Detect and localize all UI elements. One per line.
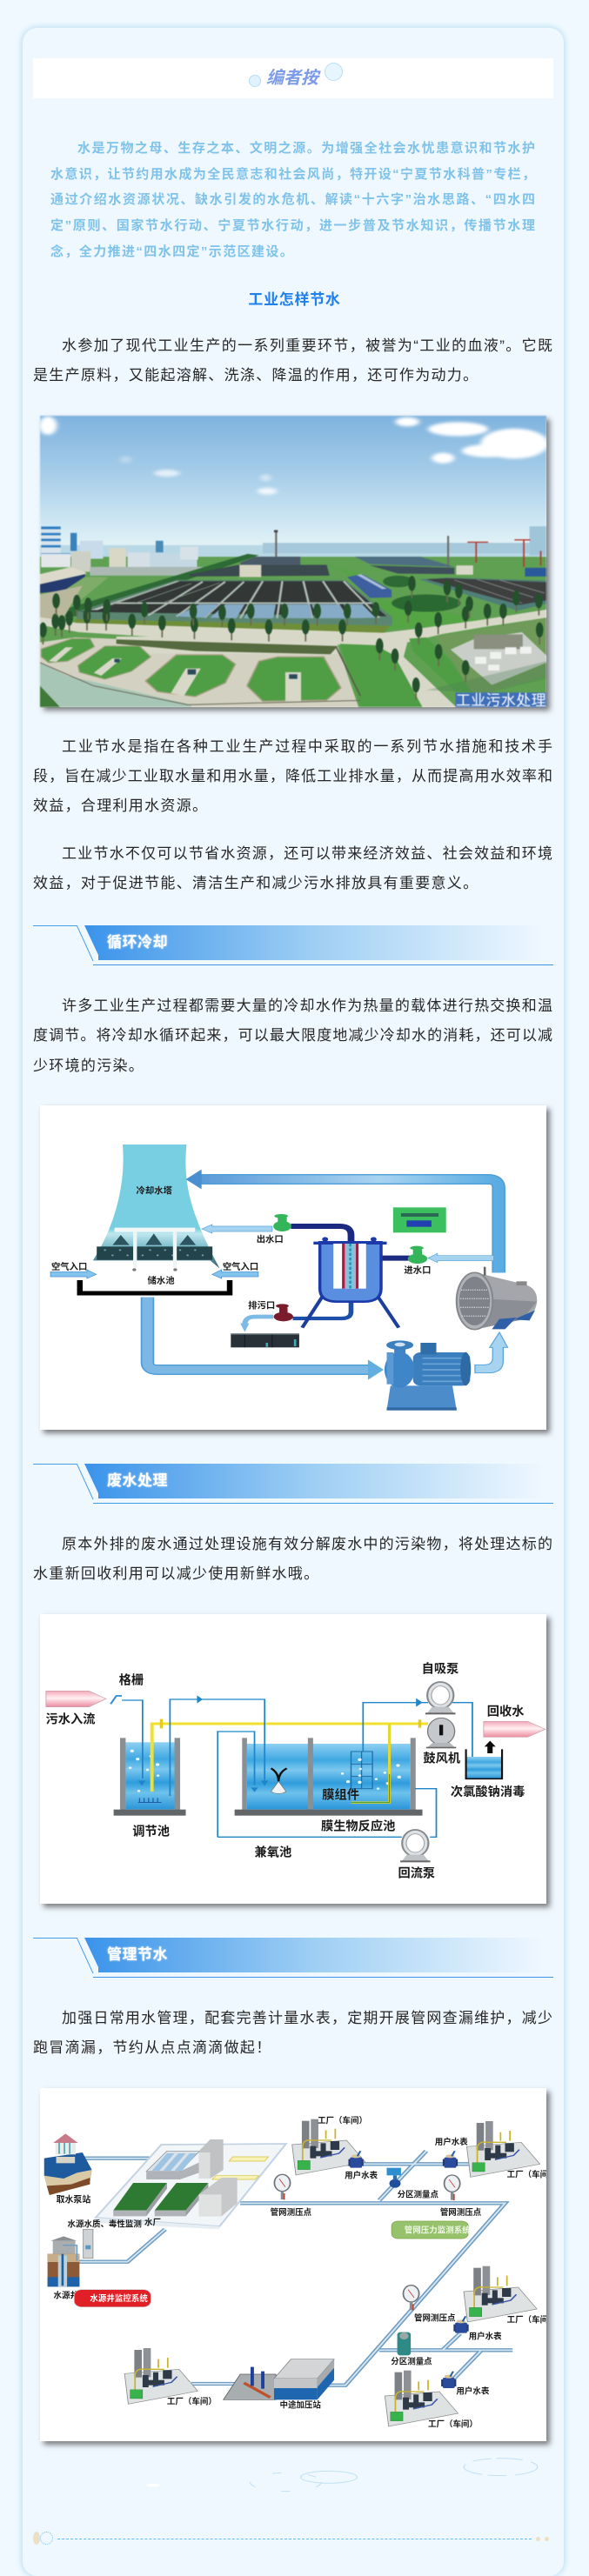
diagram: cooling water system: 空气入口	[223, 1261, 258, 1272]
labels: 鼓风机	[423, 1751, 461, 1766]
intake pump station	[44, 2133, 92, 2206]
text block: editor's note	[50, 141, 536, 259]
text block: editor's note: 定”原则、国家节水行动、宁夏节水行动，进一步普及节水知识，传播节水理	[50, 218, 536, 233]
text block: cooling	[33, 998, 553, 1074]
section header: wastewater treatment: 废水处理	[107, 1472, 168, 1489]
pump outlet arrow	[475, 1332, 508, 1373]
network labels: 用户水表	[456, 2386, 490, 2396]
tree belt	[41, 554, 259, 617]
factories	[292, 2119, 365, 2175]
icon: beige pill	[33, 2532, 40, 2545]
blue pipes	[122, 1699, 472, 1837]
filter vessel	[291, 1226, 412, 1328]
diagram: wastewater treatment process: 格栅	[119, 1672, 144, 1687]
filter outlet arrows	[202, 1225, 494, 1263]
diagram: cooling water system	[40, 1105, 546, 1430]
labels: 膜生物反应池	[321, 1818, 395, 1833]
heading: editor's note: 编者按	[266, 69, 318, 88]
text block: definition of industrial water saving	[33, 738, 553, 814]
text block: benefits: 工业节水不仅可以节省水资源，还可以带来经济效益、社会效益和环境	[62, 845, 553, 862]
section header: recirculating cooling	[33, 925, 553, 965]
left buildings	[41, 526, 61, 567]
labels: 膜组件	[322, 1787, 359, 1803]
section header: wastewater treatment	[33, 1464, 553, 1504]
labels: 回收水	[487, 1704, 525, 1718]
text block: editor's note: 水是万物之母、生存之本、文明之源。为增强全社会水忧患意识和节水护	[77, 141, 536, 156]
labels: 自吸泵	[422, 1660, 458, 1676]
decoration: water ripples	[146, 2458, 538, 2493]
heat exchanger	[457, 1267, 537, 1330]
monitoring station and well: 水源井	[54, 2291, 78, 2301]
booster station: 中途加压站	[279, 2399, 321, 2410]
reactor tank	[235, 1738, 423, 1816]
horizon	[40, 545, 546, 561]
section header: managed water saving	[33, 1938, 553, 1978]
zone flow meters	[387, 2168, 411, 2355]
trees	[39, 576, 544, 699]
diagram: wastewater treatment process	[40, 1614, 546, 1904]
cooling tower	[93, 1145, 219, 1271]
diagram: wastewater treatment process: 污水入流	[45, 1712, 95, 1727]
pumps	[425, 1682, 456, 1714]
icon: beige dots	[536, 2537, 549, 2541]
water plant: 水源水质、毒性监测	[68, 2219, 142, 2230]
labels	[132, 1660, 525, 1880]
labels: 次氯酸钠消毒	[451, 1784, 525, 1799]
diagram: cooling water system: 储水池	[147, 1275, 175, 1286]
text block: wastewater: 原本外排的废水通过处理设施有效分解废水中的污染物，将处理达标的	[62, 1536, 553, 1552]
booster station	[224, 2359, 334, 2410]
diagram: pipe network management	[40, 2088, 546, 2441]
red button: well monitoring	[74, 2290, 151, 2307]
text block: intro	[33, 337, 553, 384]
pump	[385, 1340, 471, 1411]
photo: industrial wastewater treatment plant	[40, 416, 546, 707]
network labels: 分区测量点	[398, 2190, 439, 2200]
right skyline	[530, 526, 546, 555]
monitoring station and well	[48, 2229, 93, 2301]
outflow arrow	[484, 1721, 545, 1737]
text block: cooling: 少环境的污染。	[33, 1058, 144, 1074]
pipes	[77, 2151, 512, 2386]
far tanks	[240, 557, 300, 565]
PLC	[231, 1333, 299, 1347]
water plant: 水厂	[144, 2217, 161, 2227]
text block: benefits	[33, 845, 553, 891]
labels: 调节池	[132, 1824, 170, 1839]
diagram: cooling water system: 空气入口	[51, 1261, 87, 1272]
text block: management	[33, 2010, 553, 2056]
text block: definition of industrial water saving: 效益，合理利用水资源。	[33, 797, 208, 814]
network labels	[167, 2116, 557, 2429]
air inlet arrows	[50, 1270, 258, 1278]
text block: definition of industrial water saving: 段，旨在减少工业取水量和用水量，降低工业排水量，从而提高用水效率和	[33, 768, 553, 784]
section header: managed water saving: 管理节水	[107, 1946, 168, 1963]
footer divider	[33, 2532, 549, 2545]
yellow air pipe	[152, 1719, 428, 1803]
network labels: 用户水表	[469, 2332, 502, 2342]
text block: editor's note: 念，全力推进“四水四定”示范区建设。	[50, 244, 294, 259]
green button: pressure monitoring: 管网压力监测系统	[405, 2225, 471, 2235]
network labels: 分区测量点	[391, 2357, 432, 2367]
hedge	[392, 595, 461, 612]
network labels: 用户水表	[345, 2170, 378, 2180]
diagram: cooling water system: 出水口	[257, 1233, 284, 1245]
inflow arrow	[46, 1691, 106, 1707]
text block: cooling: 许多工业生产过程都需要大量的冷却水作为热量的载体进行热交换和温	[62, 998, 553, 1014]
blower	[426, 1718, 456, 1748]
strip + road	[75, 619, 391, 634]
gauges	[274, 2174, 291, 2199]
text block: intro: 是生产原料，又能起溶解、洗涤、降温的作用，还可作为动力。	[33, 367, 479, 384]
text block: editor's note: 水意识，让节约用水成为全民意志和社会风尚，特开设“宁夏节水科普”专栏，	[50, 167, 536, 182]
network labels: 管网测压点	[440, 2207, 482, 2218]
green button: pressure monitoring	[392, 2221, 471, 2239]
aerator	[271, 1768, 287, 1793]
text block: editor's note: 通过介绍水资源状况、缺水引发的水危机、解读“十六字”治水思路、“四水四	[50, 192, 536, 207]
lawn plaza	[40, 637, 358, 707]
icon: large bubble	[325, 63, 343, 81]
disinfection tank	[466, 1749, 502, 1779]
supply arrow bottom	[147, 1298, 384, 1380]
panel: editor's note header bar	[33, 58, 553, 98]
network labels: 工厂（车间）	[318, 2116, 367, 2126]
intake pump station: 取水泵站	[57, 2194, 90, 2206]
icon: dashed circle	[40, 2532, 53, 2545]
network labels: 工厂（车间）	[167, 2396, 217, 2406]
water plant	[68, 2139, 286, 2230]
control box	[393, 1207, 446, 1232]
text block: cooling: 度调节。将冷却水循环起来，可以最大限度地减少冷却水的消耗，还可以减	[33, 1027, 553, 1044]
regulating tank	[114, 1738, 186, 1816]
right lower building	[436, 617, 546, 692]
diagram: cooling water system: 进水口	[404, 1265, 431, 1276]
text block: benefits: 效益，对于促进节能、清洁生产和减少污水排放具有重要意义。	[33, 875, 479, 891]
section header: recirculating cooling: 循环冷却	[107, 934, 168, 951]
network labels: 工厂（车间）	[428, 2419, 478, 2429]
text block: wastewater	[33, 1536, 553, 1582]
cooling tower: 冷却水塔	[137, 1185, 173, 1196]
main sedimentation tank	[77, 580, 392, 626]
labels: 回流泵	[398, 1865, 435, 1880]
lower left wall	[40, 663, 191, 707]
network labels: 用户水表	[435, 2137, 468, 2147]
water basin	[80, 1280, 230, 1293]
user water meters	[348, 2151, 364, 2168]
text block: wastewater: 水重新回收利用可以减少使用新鲜水哦。	[33, 1565, 319, 1582]
valves	[273, 1214, 291, 1231]
return arrow top	[186, 1170, 499, 1272]
heading: how industry saves water: 工业怎样节水	[248, 291, 341, 308]
network labels: 管网测压点	[414, 2312, 456, 2323]
text block: intro: 水参加了现代工业生产的一系列重要环节，被誉为“工业的血液”。它既	[62, 337, 553, 354]
red button: well monitoring: 水源井监控系统	[90, 2293, 148, 2304]
diagram: cooling water system: 排污口	[248, 1299, 275, 1311]
labels: 兼氧池	[255, 1845, 291, 1860]
text block: management: 跑冒滴漏，节约从点点滴滴做起！	[33, 2039, 271, 2056]
icon: small bubble	[249, 75, 261, 87]
text block: definition of industrial water saving: 工业节水是指在各种工业生产过程中采取的一系列节水措施和技术手	[62, 738, 553, 755]
drain arrow	[244, 1317, 273, 1325]
roof shed	[347, 574, 392, 598]
text block: management: 加强日常用水管理，配套完善计量水表，定期开展管网查漏维护，减少	[62, 2010, 553, 2026]
network labels: 管网测压点	[271, 2207, 312, 2218]
